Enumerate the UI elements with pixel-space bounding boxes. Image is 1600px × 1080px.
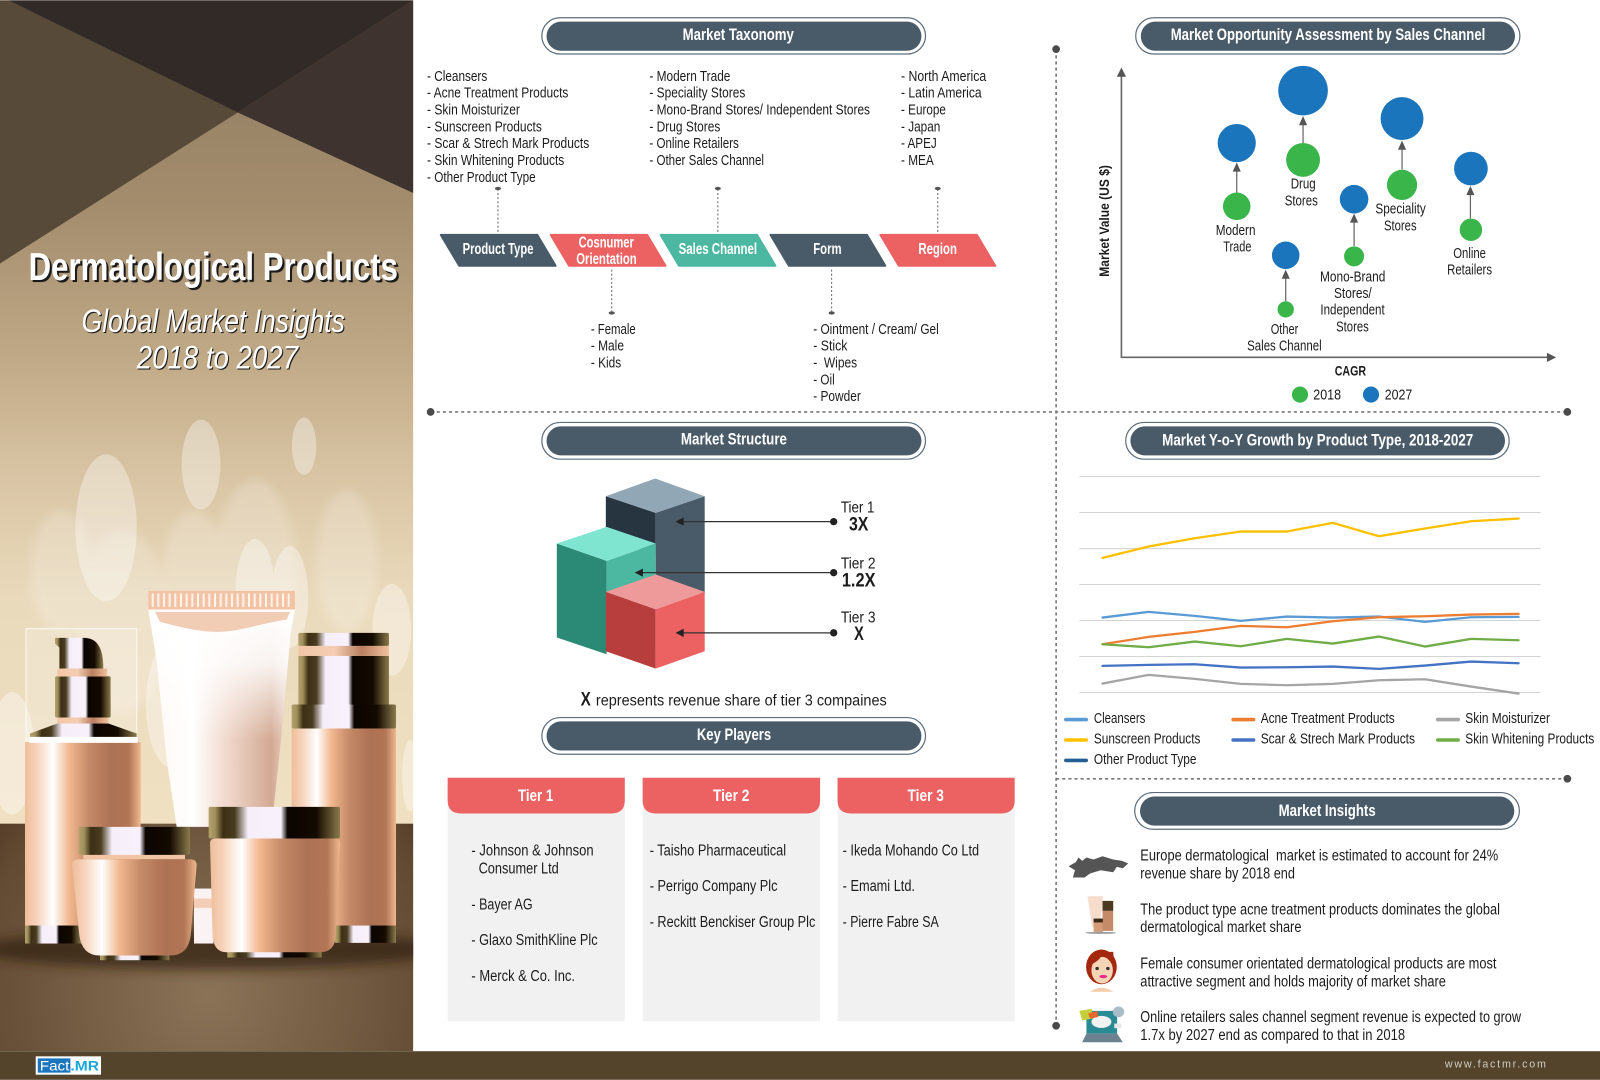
list: regions — [901, 69, 987, 169]
chart legend: Other Product Type — [1094, 752, 1196, 768]
line: scar and strech mark products — [1103, 662, 1519, 669]
card: tier 3: - Ikeda Mohando Co Ltd — [843, 842, 979, 859]
tube — [148, 591, 295, 944]
website url: www.factmr.com — [1444, 1059, 1546, 1071]
line: acne treatment products — [1103, 614, 1519, 644]
right bottle — [292, 633, 396, 943]
insight text: female consumers: attractive segment and holds majority of market share — [1140, 973, 1446, 990]
list: forms: - Oil — [813, 372, 835, 388]
list: regions: - APEJ — [901, 136, 937, 152]
heading: market taxonomy: Market Taxonomy — [683, 25, 794, 44]
card: tier 2: - Perrigo Company Plc — [650, 878, 778, 895]
subtitle: 2018 to 2027 — [136, 339, 300, 376]
card: tier 2: Tier 2 — [713, 786, 749, 805]
panel: market structure — [542, 422, 926, 710]
chart legend: Acne Treatment Products — [1261, 711, 1395, 727]
list: sales channels: - Other Sales Channel — [649, 153, 764, 169]
logo: Fact.MR — [36, 1056, 101, 1075]
bubble labels: Mono-Brand — [1320, 269, 1385, 285]
subtitle: Global Market Insights — [82, 302, 345, 339]
list: regions: - Japan — [901, 119, 940, 135]
footer bar — [0, 1051, 1600, 1080]
list: regions: - Latin America — [901, 86, 982, 102]
list: forms — [813, 322, 939, 405]
list: forms: - Ointment / Cream/ Gel — [813, 322, 939, 338]
note on X: represents revenue share of tier 3 compaines — [596, 692, 887, 709]
line: cleansers — [1103, 612, 1519, 622]
bubbles: 2027 — [1218, 66, 1488, 269]
logo: Fact.MR: Fact — [40, 1059, 69, 1075]
list: product types: - Other Product Type — [427, 170, 536, 186]
main title: Dermatological Products — [29, 246, 398, 289]
insight text: europe — [1140, 847, 1498, 882]
category: sales channel — [661, 235, 775, 266]
list: forms: - Stick — [813, 339, 848, 355]
panel: market opportunity assessment — [1097, 18, 1556, 404]
bubble labels: Speciality — [1375, 201, 1426, 217]
heading: market structure — [542, 422, 926, 459]
chart legend: Scar & Strech Mark Products — [1261, 732, 1415, 748]
card: tier 1: - Johnson & Johnson — [471, 842, 594, 859]
bubble labels: Trade — [1223, 240, 1251, 256]
chart legend: Skin Moisturizer — [1465, 711, 1550, 727]
card: tier 2 — [643, 778, 820, 1021]
list: sales channels — [649, 69, 870, 169]
heading: market insights: Market Insights — [1279, 801, 1376, 820]
connectors — [495, 187, 941, 315]
card: tier 2: - Reckitt Benckiser Group Plc — [650, 914, 815, 931]
heading: market opportunity — [1136, 18, 1520, 54]
heading: market taxonomy — [542, 18, 926, 54]
tier 2 block — [557, 527, 656, 654]
category: product type: Product Type — [463, 241, 533, 258]
bubble labels: Drug — [1291, 176, 1316, 192]
tier arrows — [635, 518, 837, 637]
heading: key players — [542, 718, 926, 754]
list: product types: - Sunscreen Products — [427, 119, 542, 135]
chart legend — [1066, 711, 1594, 768]
category: consumer orientation: Cosnumer — [579, 235, 634, 252]
card: tier 1: Tier 1 — [518, 786, 553, 805]
tier labels: Tier 2 — [841, 556, 876, 573]
category: consumer orientation: Orientation — [576, 251, 637, 268]
list: sales channels: - Modern Trade — [649, 69, 730, 85]
bubble labels: Independent — [1320, 302, 1385, 318]
panel: cover with title and cosmetic products — [0, 0, 439, 1051]
card: tier 2: - Taisho Pharmaceutical — [650, 842, 786, 859]
bubble labels: Sales Channel — [1247, 339, 1322, 355]
category: consumer orientation — [551, 235, 666, 268]
icon: online laptop — [1079, 1007, 1124, 1042]
icon: woman face — [1086, 950, 1117, 992]
insight text: female consumers — [1140, 956, 1497, 990]
heading: market opportunity: Market Opportunity Assessment by Sales Channel — [1171, 25, 1485, 44]
dotted section dividers — [427, 45, 1571, 1030]
bubble labels: Other — [1271, 322, 1298, 338]
panel: market taxonomy — [427, 18, 995, 405]
list: sales channels: - Online Retailers — [649, 136, 739, 152]
chart axes — [1117, 68, 1556, 362]
list: regions: - North America — [901, 69, 987, 85]
y axis label: Market Value (US $) — [1097, 165, 1113, 277]
legend — [1292, 387, 1412, 404]
icon: cosmetic products — [1085, 896, 1116, 934]
line: sunscreen products — [1103, 519, 1519, 558]
tier labels: 1.2X — [842, 569, 876, 591]
x axis label: CAGR — [1335, 364, 1367, 380]
list: consumer orientation: - Male — [591, 339, 624, 355]
list: product types: - Skin Moisturizer — [427, 102, 520, 118]
heading: y-o-y growth — [1126, 422, 1509, 459]
list: consumer orientation: - Kids — [591, 356, 621, 372]
heading: market insights — [1135, 793, 1519, 829]
large jar — [209, 807, 340, 958]
heading: key players: Key Players — [697, 725, 771, 744]
floor — [0, 824, 413, 1051]
logo: Fact.MR: .MR — [70, 1059, 100, 1075]
category: form: Form — [813, 241, 842, 258]
card: tier 1 — [448, 778, 625, 1021]
list: forms: - Powder — [813, 389, 861, 405]
note on X: X — [581, 688, 591, 710]
small jar — [72, 827, 197, 960]
panel: market insights — [1069, 793, 1521, 1044]
tier labels: X — [854, 623, 864, 645]
chart legend: Sunscreen Products — [1094, 732, 1200, 748]
card: tier 3: - Emami Ltd. — [843, 878, 915, 895]
bubble labels: Stores — [1336, 319, 1369, 335]
bubbles: 2018 — [1223, 143, 1482, 318]
insight text: acne treatment: dermatological market share — [1140, 919, 1302, 936]
bubble labels: Stores/ — [1334, 286, 1372, 302]
bubble labels: Modern — [1216, 223, 1256, 239]
tier labels: 3X — [849, 513, 868, 535]
note on X — [581, 688, 887, 710]
bubble arrows — [1233, 116, 1474, 301]
subtitle — [82, 308, 346, 370]
category: region: Region — [918, 241, 957, 258]
card: tier 3: - Pierre Fabre SA — [843, 914, 939, 931]
tier 1 block — [606, 479, 705, 594]
category: region — [880, 235, 995, 266]
line chart — [1079, 477, 1541, 694]
list: sales channels: - Speciality Stores — [649, 86, 745, 102]
list: product types: - Skin Whitening Products — [427, 153, 564, 169]
line: skin moisturizer — [1103, 675, 1519, 694]
insight text: acne treatment — [1140, 901, 1500, 936]
tier 3 block — [606, 575, 705, 669]
bubble labels: Online — [1453, 246, 1486, 262]
card: tier 1: Consumer Ltd — [479, 861, 559, 878]
insight text: acne treatment: The product type acne treatment products dominates the global — [1140, 901, 1500, 918]
list: consumer orientation: - Female — [591, 322, 636, 338]
card: tier 1: - Bayer AG — [471, 896, 533, 913]
tier labels: Tier 3 — [841, 610, 876, 627]
icon: europe map — [1069, 856, 1128, 878]
list: product types: - Acne Treatment Products — [427, 86, 568, 102]
insight text: europe: revenue share by 2018 end — [1140, 865, 1295, 882]
insight text: female consumers: Female consumer orientated dermatological products are most — [1140, 956, 1497, 973]
list: product types: - Cleansers — [427, 69, 487, 85]
list: consumer orientation — [591, 322, 636, 372]
list: regions: - MEA — [901, 153, 934, 169]
list: sales channels: - Mono-Brand Stores/ Independent Stores — [649, 102, 870, 118]
insight text: online retailers — [1140, 1009, 1521, 1044]
category: product type — [441, 235, 556, 266]
insight text: europe: Europe dermatological market is estimated to account for 24% — [1140, 847, 1498, 864]
card: tier 3 — [838, 778, 1015, 1021]
list: regions: - Europe — [901, 102, 946, 118]
bubble labels: Stores — [1384, 218, 1417, 234]
card: tier 1: - Merck & Co. Inc. — [471, 968, 575, 985]
line: skin whitening products — [1103, 637, 1519, 647]
list: forms: - Wipes — [813, 356, 857, 372]
insight text: online retailers: 1.7x by 2027 end as compared to that in 2018 — [1140, 1027, 1405, 1044]
tier labels — [841, 499, 876, 645]
panel: key players — [448, 718, 1015, 1021]
legend: 2027 — [1385, 388, 1412, 404]
product illustration: bottles, tube and jars — [25, 591, 396, 960]
bubble labels: Stores — [1285, 193, 1318, 209]
chart legend: Cleansers — [1094, 711, 1145, 727]
heading: y-o-y growth: Market Y-o-Y Growth by Product Type, 2018-2027 — [1162, 431, 1473, 450]
bubble labels: Retailers — [1447, 263, 1492, 279]
bubble labels — [1216, 176, 1492, 355]
heading: market structure: Market Structure — [681, 430, 787, 449]
list: sales channels: - Drug Stores — [649, 119, 720, 135]
card: tier 1: - Glaxo SmithKline Plc — [471, 932, 598, 949]
category: form — [771, 235, 885, 266]
panel: market y-o-y growth — [1066, 422, 1594, 768]
tier labels: Tier 1 — [841, 499, 875, 516]
isometric tier blocks — [557, 479, 705, 669]
list: product types: - Scar & Strech Mark Products — [427, 136, 589, 152]
category: sales channel: Sales Channel — [679, 241, 757, 258]
list: product types — [427, 69, 589, 186]
card: tier 3: Tier 3 — [908, 786, 944, 805]
legend: 2018 — [1313, 388, 1341, 404]
left pump bottle — [25, 629, 141, 944]
